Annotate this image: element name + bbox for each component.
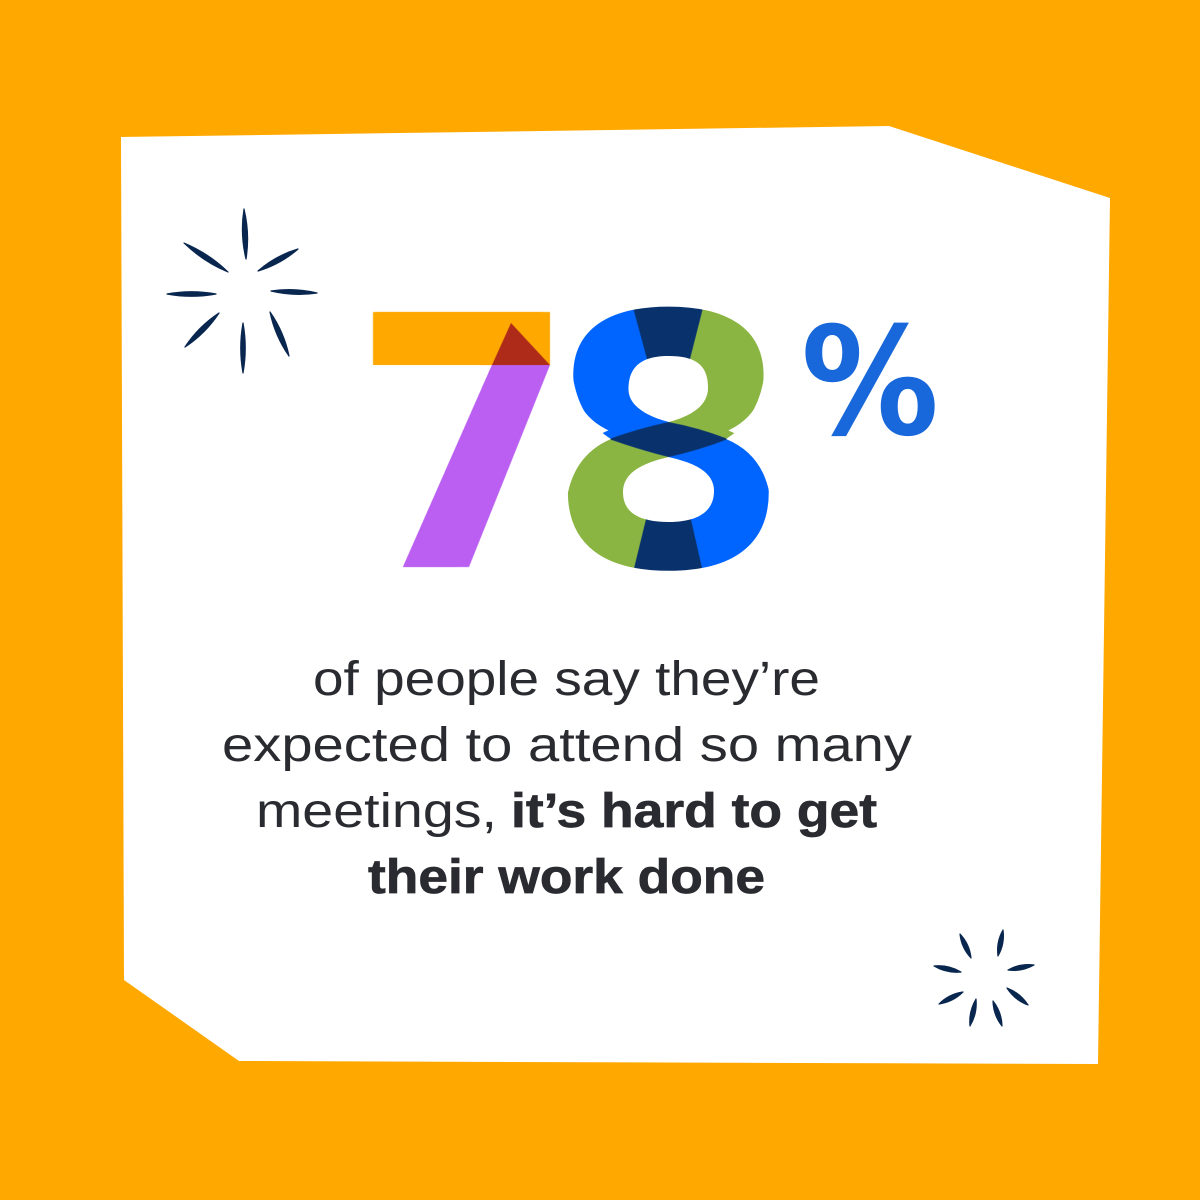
line 1: of people say they’re — [313, 653, 820, 706]
icon: burst bottom right — [934, 930, 1034, 1026]
big number 78 — [357, 242, 784, 650]
digit 7 in orange, red and purple: 7 — [357, 242, 566, 650]
upper opening of the 8 — [628, 356, 708, 422]
line 4 bold: their work done — [368, 851, 765, 904]
lower opening of the 8 — [623, 457, 714, 522]
white panel — [121, 126, 1110, 1064]
right waist notch of the 8 — [726, 370, 782, 505]
line 2: expected to attend so many — [222, 719, 912, 772]
line 3 bold: it’s hard to get — [511, 785, 877, 838]
digit 8 in blue, navy and green: 8 — [552, 250, 784, 641]
left waist notch of the 8 — [555, 370, 611, 505]
line 3 regular: meetings, — [256, 785, 497, 838]
middle crossing of the 8 — [630, 445, 707, 480]
percent sign: % — [801, 296, 939, 470]
statement text — [222, 653, 912, 904]
icon: burst top left — [167, 209, 317, 373]
